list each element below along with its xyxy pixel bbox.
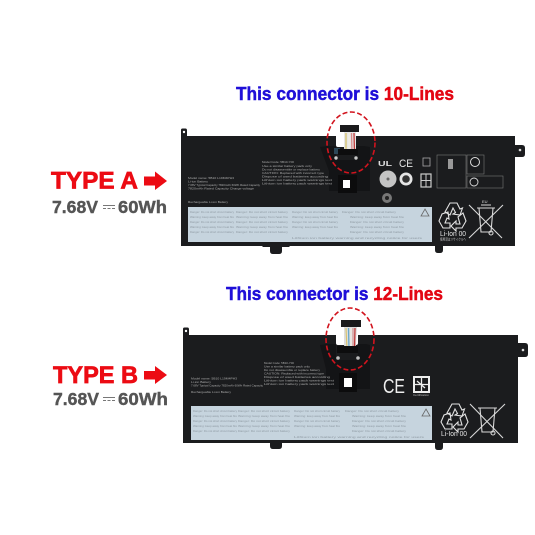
warning label panel A: Lithium ion battery warning and recycling notice for users	[292, 236, 423, 240]
model text block A: Model name: 5B10 L19M4PH3	[188, 176, 235, 180]
text: Li-ion 00 A	[440, 229, 466, 242]
battery A body	[181, 128, 525, 254]
warning label panel B: Danger: Do not short circuit battery	[238, 409, 291, 413]
model text block A: Lithium ion battery pack warnings text	[262, 182, 332, 186]
warning label panel A: Danger: Do not short circuit battery	[236, 230, 289, 234]
spec: type A voltage and energy: 7.68V	[52, 197, 98, 217]
certification marks A	[378, 155, 503, 203]
warning label panel B: Warning: keep away from heat fire	[238, 424, 291, 428]
model text block A: Li-ion Battery	[188, 180, 209, 184]
connector A	[334, 125, 359, 160]
warning label panel B: Danger: Do not short circuit battery	[193, 419, 238, 423]
warning label panel B: Danger: Do not short circuit battery	[238, 429, 291, 433]
model text block B: Model Code: 5B10-Y00	[264, 361, 294, 365]
warning label panel B: Danger: Do not short circuit battery	[238, 419, 291, 423]
model text block B: Dispose of used batteries according	[264, 375, 331, 379]
recycle icon A	[439, 203, 466, 231]
battery B	[183, 320, 528, 450]
white QR window A	[338, 175, 357, 193]
spec: type B voltage and energy: 60Wh	[118, 389, 168, 409]
connector B	[336, 320, 361, 360]
warning label panel B: Danger: Do not short circuit battery	[294, 409, 341, 413]
warning label panel B	[191, 406, 432, 440]
recycle icon B	[441, 404, 468, 432]
model text block B: CAUTION: Replaced with incorrect type	[264, 372, 325, 376]
warning label panel B: Warning: keep away from heat fire	[352, 414, 407, 418]
warning label panel B: Warning: keep away from heat fire	[294, 414, 341, 418]
crossed bin icon B	[470, 404, 505, 438]
battery B body	[183, 328, 528, 450]
model text block B: Use a similar battery pack only	[264, 364, 311, 368]
model text block B	[191, 361, 334, 394]
warning label panel A: Danger: Do not short circuit battery	[350, 230, 405, 234]
model text block A: Rechargeable Li-ion Battery	[188, 200, 229, 204]
white QR window B	[339, 373, 357, 392]
warning label panel A: Warning: keep away from heat fire	[292, 215, 339, 219]
warning label panel A: Danger: Do not short circuit battery	[292, 210, 339, 214]
warning label panel A: Danger: Do not short circuit battery	[350, 220, 405, 224]
warning label panel A: Warning: keep away from heat fire	[190, 225, 235, 229]
warning label panel B: Danger: Do not short circuit battery	[345, 409, 400, 413]
certification marks A: UL	[378, 161, 393, 168]
model text block B: Lithium ion battery pack warnings text	[264, 378, 334, 382]
spec: type A voltage and energy: 60Wh	[118, 197, 167, 217]
warning label panel B: Danger: Do not short circuit battery	[294, 419, 341, 423]
battery A tab shading	[320, 146, 370, 191]
warning label panel B: Lithium ion battery warning and recycling notice for users	[294, 435, 425, 439]
model text block B: 7.68V Typical Capacity 7820mAh 60Wh Rated Capacity	[191, 384, 264, 388]
model text block A	[188, 160, 332, 204]
warning label panel B: Warning: keep away from heat fire	[294, 424, 341, 428]
crossed bin icon A: EU	[482, 199, 488, 204]
warning label panel A: Warning: keep away from heat fire	[292, 225, 339, 229]
warning label panel B: Warning: keep away from heat fire	[238, 414, 291, 418]
certification marks A: CE	[399, 158, 413, 170]
warning label panel B: Danger: Do not short circuit battery	[352, 429, 407, 433]
callout: red dashed ellipse A	[327, 112, 375, 173]
model text block B: Li-ion Battery	[191, 380, 212, 384]
battery B tab shading	[320, 344, 370, 389]
warning label panel B: Danger: Do not short circuit battery	[193, 429, 238, 433]
spec: type A voltage and energy	[52, 197, 167, 217]
label: type B: TYPE B	[53, 362, 138, 389]
model text block A: 7820mAh Rated Capacity Charge voltage	[188, 186, 255, 190]
warning label panel A: Warning: keep away from heat fire	[350, 215, 405, 219]
warning label panel B: Warning: keep away from heat fire	[193, 414, 238, 418]
model text block B: Rechargeable Li-ion Battery	[191, 390, 232, 394]
CE and certification marks B	[383, 376, 429, 398]
CE and certification marks B: CE	[383, 376, 405, 398]
model text block A: Do not disassemble or replace battery	[262, 168, 321, 172]
warning label panel A: Warning: keep away from heat fire	[350, 225, 405, 229]
model text block A: CAUTION: Replaced with incorrect type	[262, 171, 325, 175]
warning label panel A: Warning: keep away from heat fire	[236, 215, 289, 219]
spec: type B voltage and energy	[53, 389, 168, 409]
warning label panel A: Danger: Do not short circuit battery	[190, 210, 235, 214]
text: Li-ion 00 A: Li-Ion 00	[440, 229, 466, 238]
model text block A: Use a similar battery pack only	[262, 164, 313, 168]
warning label panel A: Warning: keep away from heat fire	[236, 225, 289, 229]
warning label panel A: Danger: Do not short circuit battery	[236, 210, 289, 214]
warning label panel A	[188, 207, 432, 242]
model text block A: Dispose of used batteries according	[262, 174, 329, 178]
heading: connector 10-lines: This connector is 10-Lines	[236, 84, 454, 104]
model text block B: Do not disassemble or replace battery	[264, 368, 321, 372]
warning label panel B: Danger: Do not short circuit battery	[352, 419, 407, 423]
model text block A: 7.68V Typical Capacity 7820mAh 60Wh Rated Capacity	[188, 183, 261, 187]
crossed bin icon A	[469, 199, 503, 238]
model text block A: Lithium ion battery pack warnings text	[262, 178, 332, 182]
arrow: type B	[144, 366, 167, 384]
model text block B: Lithium ion battery pack warnings text	[264, 382, 334, 386]
callout: red dashed ellipse B	[326, 308, 374, 370]
warning label panel A: Danger: Do not short circuit battery	[190, 230, 235, 234]
arrow: type A	[144, 172, 167, 190]
model text block B: Model name: 5B10 L19M4PH3	[191, 376, 238, 380]
CE and certification marks B: Certification	[413, 393, 429, 397]
text: Li-ion 00 A: 使用済はリサイクルへ	[440, 236, 466, 242]
label: type A: TYPE A	[51, 168, 138, 194]
warning label panel A: Danger: Do not short circuit battery	[236, 220, 289, 224]
warning label panel A: Warning: keep away from heat fire	[190, 215, 235, 219]
battery A	[181, 125, 525, 254]
warning label panel B: Danger: Do not short circuit battery	[193, 409, 238, 413]
spec: type B voltage and energy: 7.68V	[53, 389, 99, 409]
warning label panel A: Danger: Do not short circuit battery	[342, 210, 397, 214]
warning label panel A: Danger: Do not short circuit battery	[292, 220, 339, 224]
model text block A: Model Code: 5B10-Y00	[262, 160, 294, 164]
text: Li-ion 00 B: Li-Ion 00	[441, 429, 467, 438]
warning label panel A: Danger: Do not short circuit battery	[190, 220, 235, 224]
warning label panel B: Warning: keep away from heat fire	[352, 424, 407, 428]
heading: connector 12-lines: This connector is 12-Lines	[226, 284, 443, 304]
warning label panel B: Warning: keep away from heat fire	[193, 424, 238, 428]
